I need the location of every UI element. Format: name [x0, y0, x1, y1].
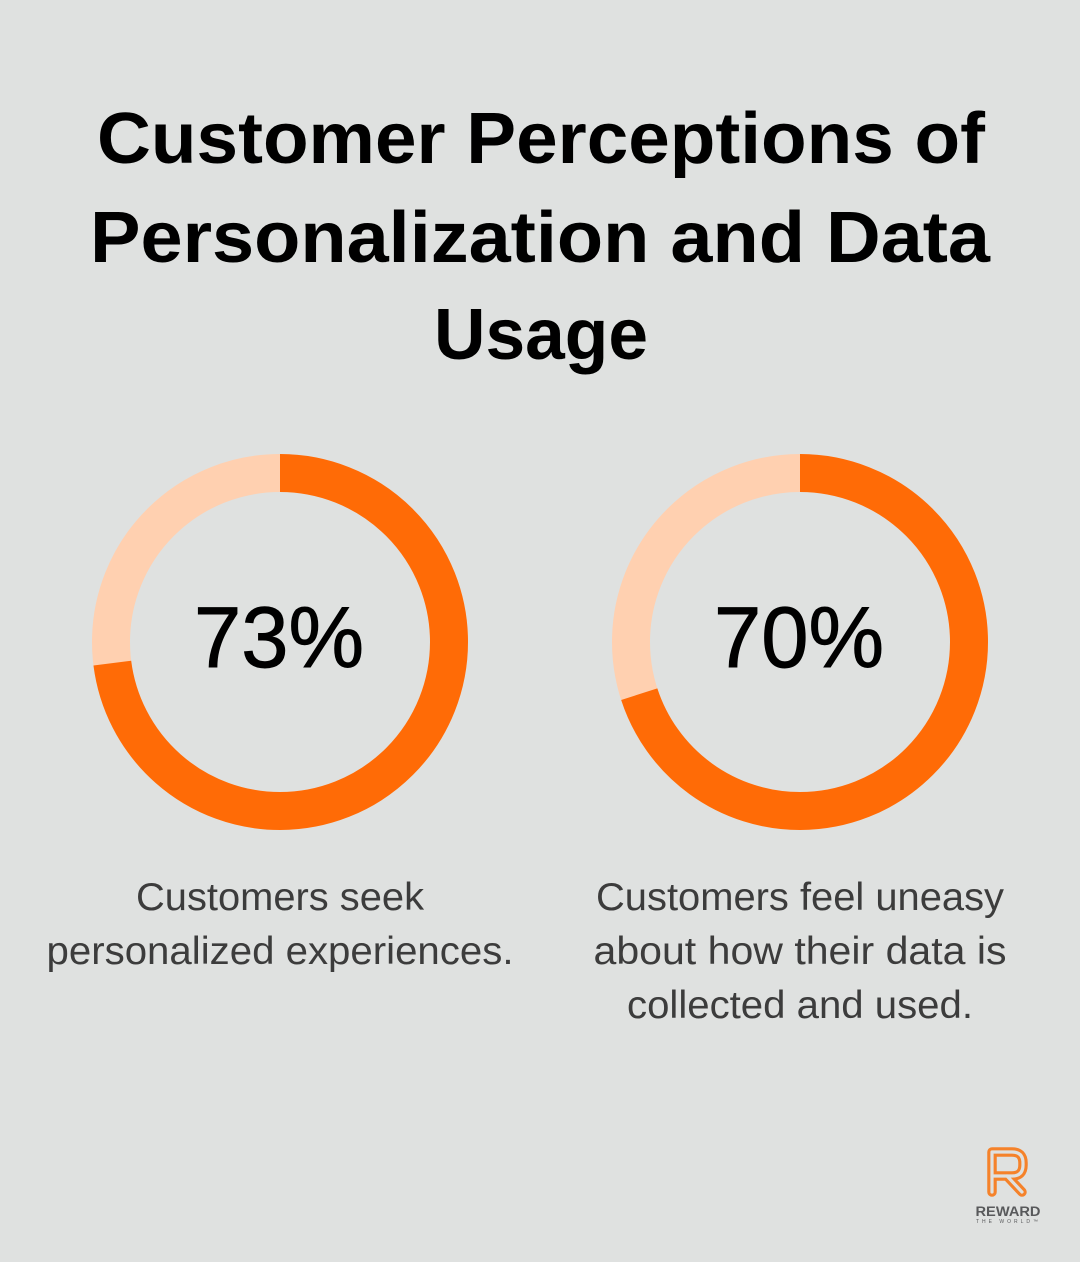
tagline: THE WORLD™ [976, 1219, 1038, 1225]
caption: 70%: collected and used. [627, 984, 973, 1027]
caption: 70%: about how their data is [594, 930, 1006, 973]
donut chart: 70%: 70% [714, 590, 884, 686]
title [90, 99, 991, 375]
caption: 70% [594, 876, 1006, 1027]
donut chart: 73%: 73% [194, 590, 364, 686]
title: Usage [434, 295, 648, 375]
logo: Reward the World [976, 1152, 1041, 1225]
title: Personalization and Data [90, 198, 991, 278]
donut chart: 70% [631, 473, 969, 811]
title: Customer Perceptions of [97, 99, 986, 179]
caption: 70%: Customers feel uneasy [596, 876, 1005, 919]
caption: 73% [46, 876, 514, 973]
wordmark: REWARD [976, 1204, 1041, 1219]
icon: R mark [992, 1152, 1023, 1192]
donut chart: 73% [111, 473, 449, 811]
caption: 73%: Customers seek [136, 876, 425, 919]
caption: 73%: personalized experiences. [46, 930, 514, 973]
